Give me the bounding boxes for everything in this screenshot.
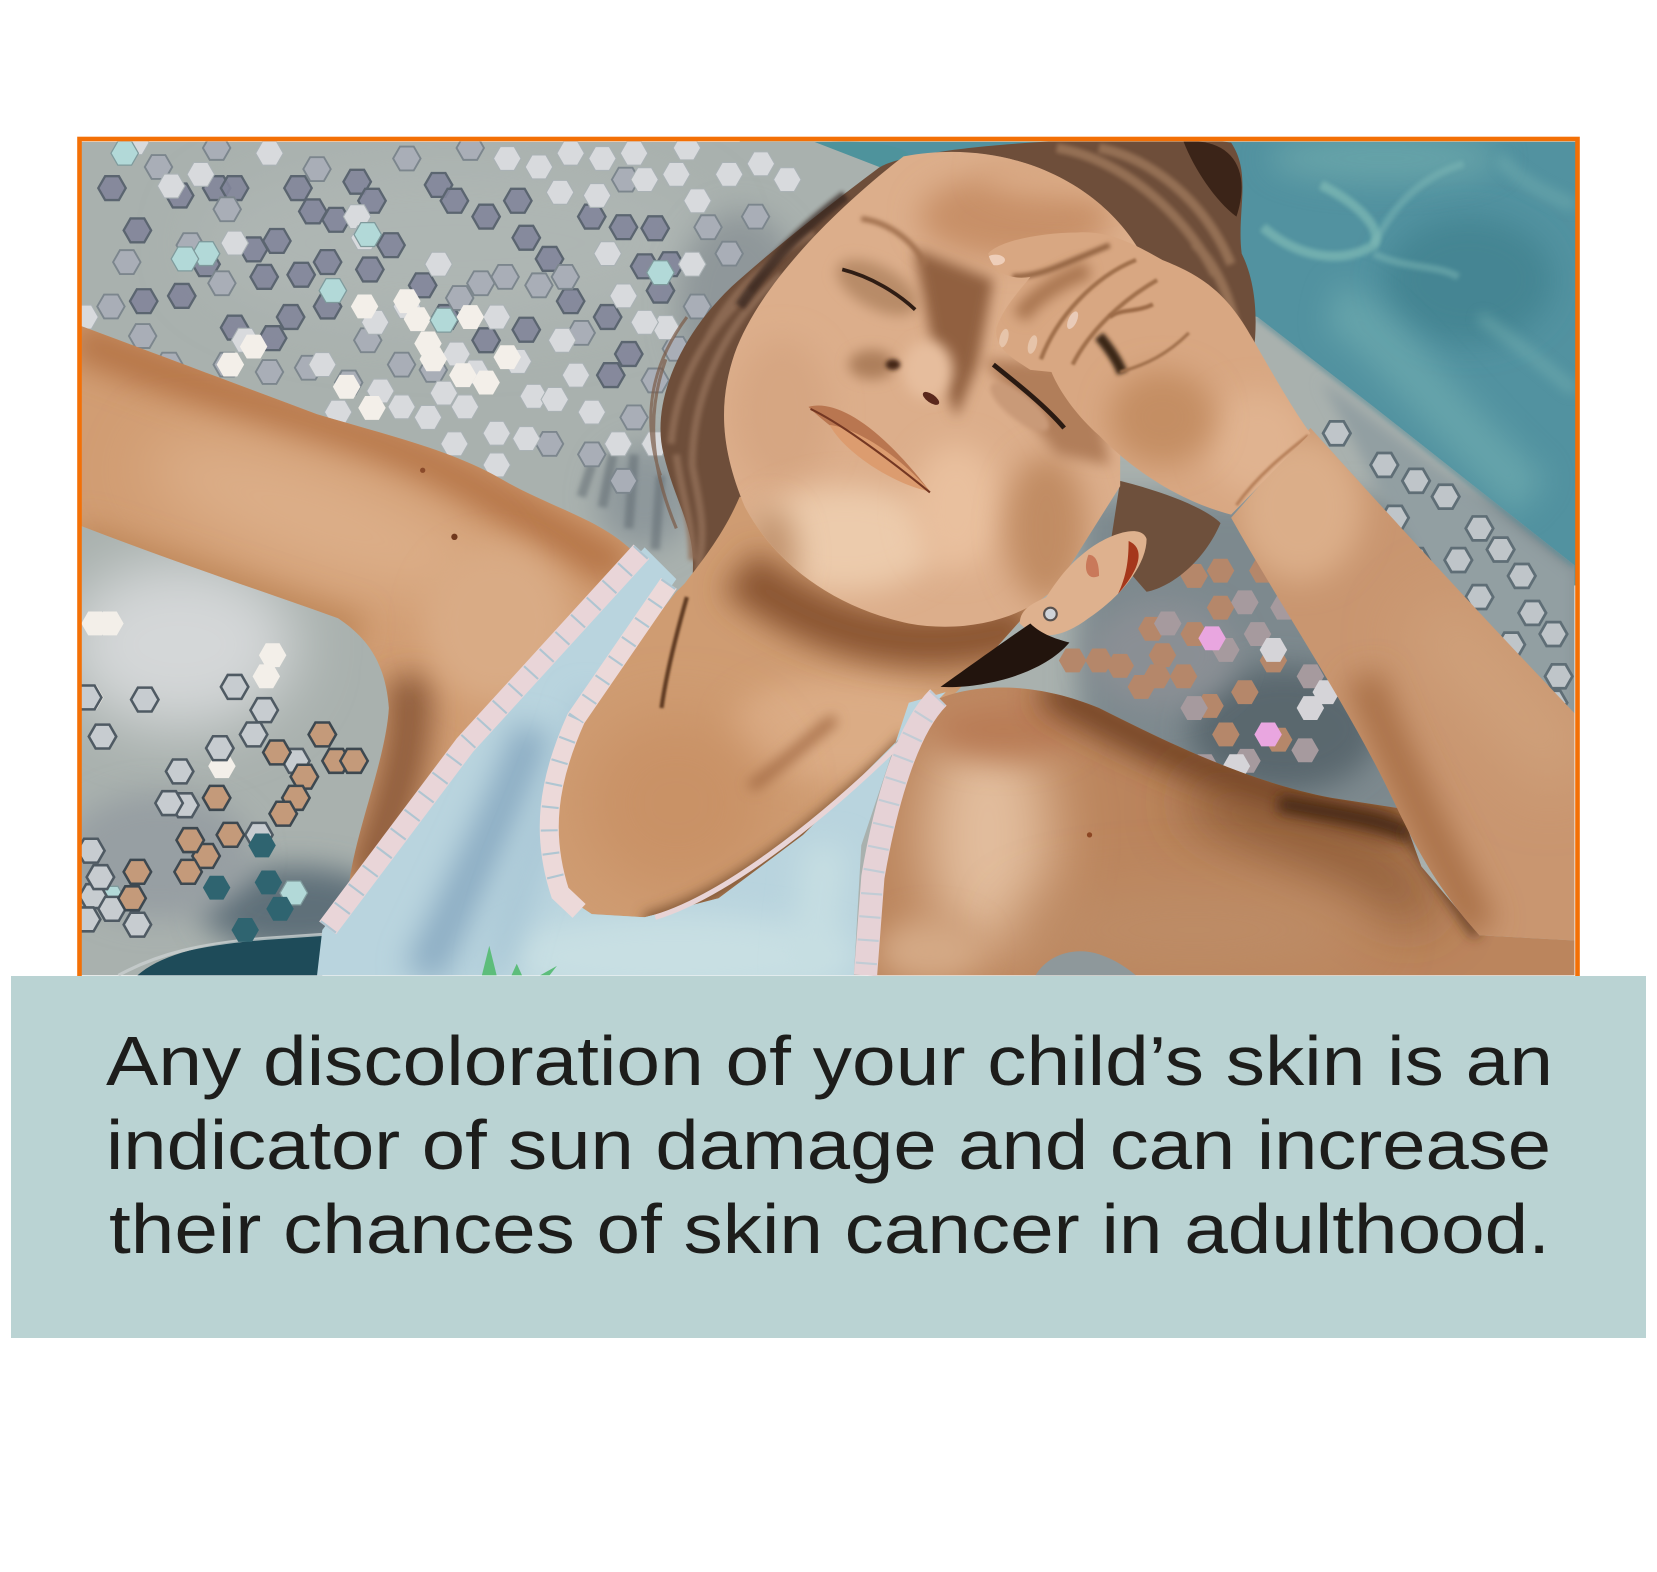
sequins: lower-right lilac-grey hexagons [1154, 553, 1345, 778]
face [708, 137, 1152, 645]
swimsuit body [312, 539, 967, 999]
outer strap trim [328, 552, 641, 928]
caption text [106, 1022, 1553, 1268]
neckline trim [655, 734, 909, 917]
sequins: pale and iridescent hexagons [71, 131, 801, 477]
caption text: their chances of skin cancer in adulthood. [109, 1190, 1550, 1268]
pool water with ripples [740, 133, 1585, 585]
sequins: far-right outlined hexagons [1323, 421, 1572, 715]
caption panel [11, 976, 1646, 1338]
inner strap trim [549, 583, 669, 911]
forearm [1215, 423, 1585, 951]
smiling lips [808, 406, 930, 492]
sequins: lower-right pale and pink hexagons [1198, 559, 1351, 778]
photo: girl relaxing on a glitter pool float [63, 131, 1585, 999]
sequins: deep teal hexagons in float shadow [203, 833, 294, 942]
hand shading the eye [983, 227, 1321, 523]
caption text: indicator of sun damage and can increase [106, 1106, 1551, 1184]
swimsuit print: green leaves [482, 946, 557, 975]
photo frame: orange border [80, 139, 1578, 984]
right closed eye [993, 365, 1064, 428]
dark pool gap under the float [137, 934, 328, 975]
dark hair below the ear [941, 623, 1069, 687]
sequins: lower-left copper hexagons [118, 723, 368, 910]
float rim highlight [118, 934, 325, 975]
caption text: Any discoloration of your child’s skin is an [106, 1022, 1553, 1100]
hair behind the head [651, 139, 1256, 581]
left arm and underarm [74, 317, 645, 909]
right upper arm [867, 676, 1585, 983]
float visible under the arm [1036, 951, 1136, 975]
float: silver base [63, 142, 1585, 987]
ear with earring [1020, 531, 1147, 635]
sequins: lower-left silver hexagons [73, 675, 310, 937]
right strap trim [865, 697, 938, 975]
lower hair behind the ear [1110, 481, 1221, 592]
sequins: bright sparkling hexagons [76, 289, 521, 778]
nose [886, 359, 941, 407]
left closed eye and brow [842, 219, 925, 310]
sequins: teal hexagons [97, 141, 674, 910]
sequins: lower-right copper hexagons [1059, 506, 1329, 831]
sequins: dark hexagons [98, 170, 701, 414]
neck and chest [528, 486, 1057, 925]
sequins: mid-grey hexagons [96, 136, 769, 493]
